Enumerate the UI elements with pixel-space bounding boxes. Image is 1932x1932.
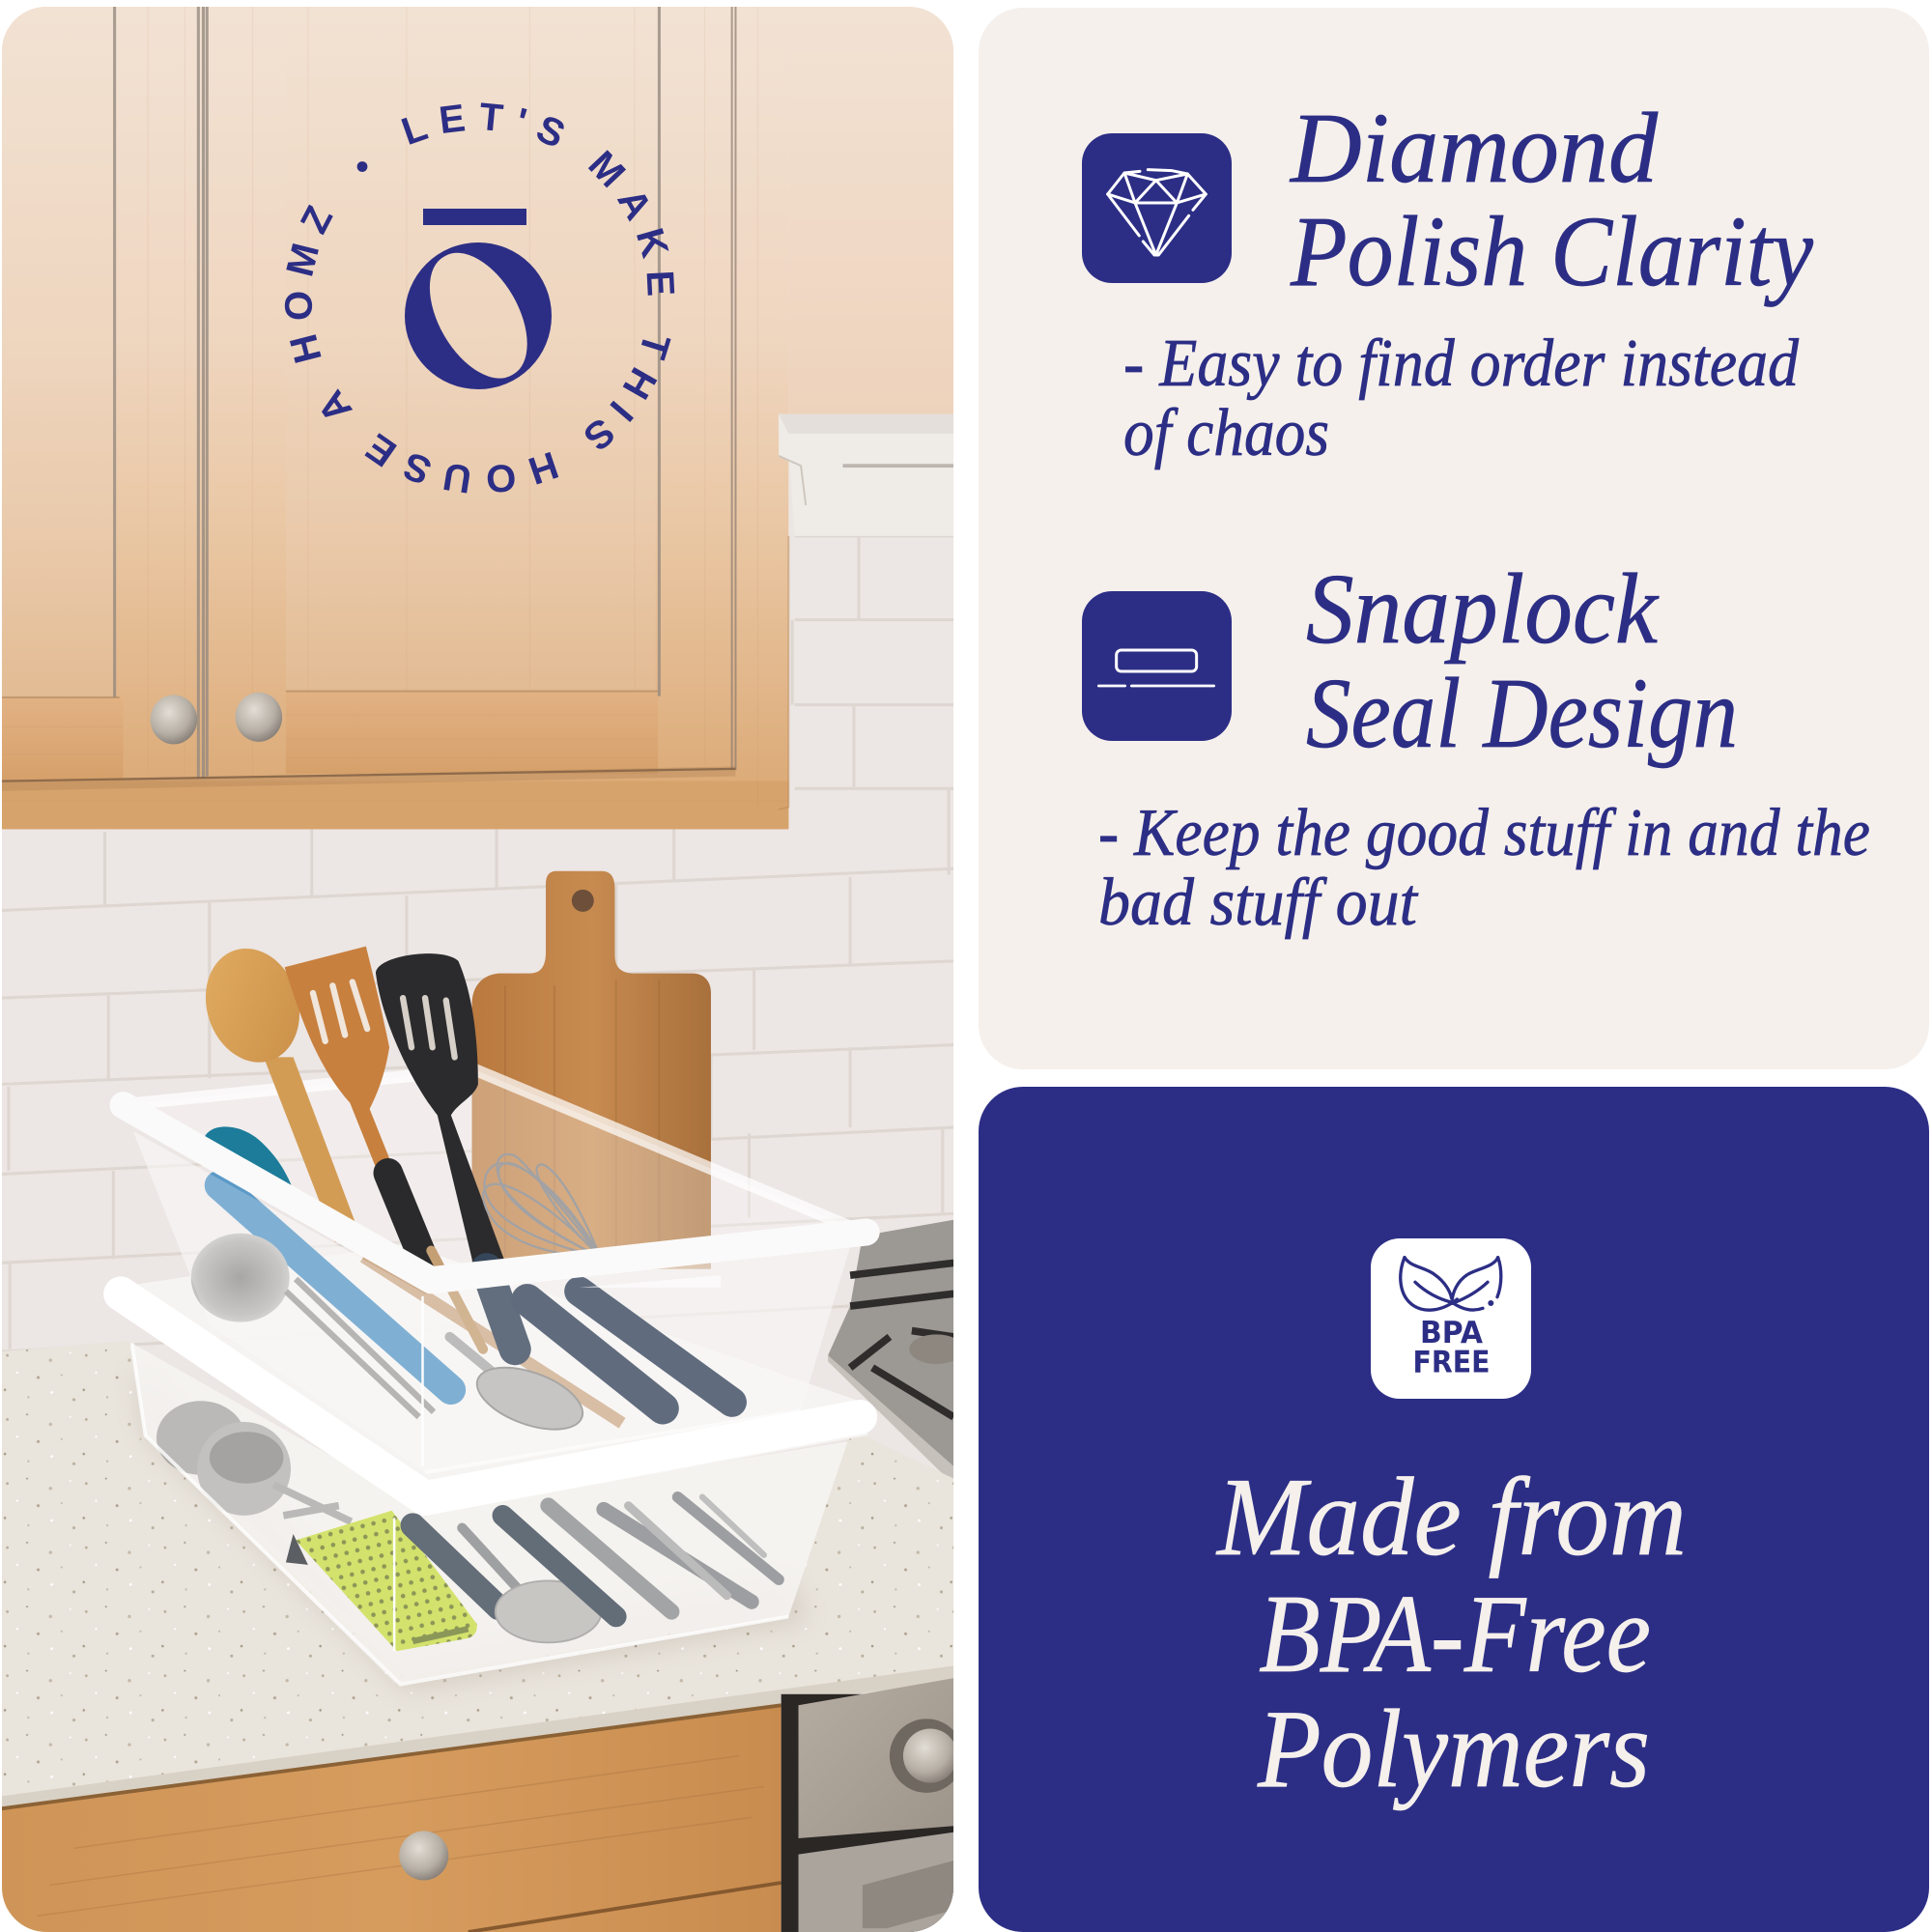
logo letter o <box>405 242 552 389</box>
tiled backsplash wall <box>2 536 953 1351</box>
heading: Snaplock Seal Design: Snaplock <box>1306 554 1660 665</box>
oven front <box>781 1678 963 1932</box>
lime grater <box>286 1511 477 1651</box>
kitchen tools <box>412 1497 779 1642</box>
text: easy to find order: of chaos <box>1123 396 1329 470</box>
heading: Diamond Polish Clarity <box>1289 93 1814 307</box>
lower container <box>113 1244 870 1685</box>
panel: BPA free <box>979 1087 1929 1932</box>
measuring cups <box>156 1401 352 1521</box>
range hood <box>779 414 953 536</box>
logo ring text: LET'S MAKE THIS HOUSE A HOMZ <box>284 102 674 493</box>
measuring spoon <box>191 1234 434 1417</box>
dark handled tools <box>431 1251 732 1441</box>
panel: kitchen photo <box>0 6 963 1932</box>
icon: BPA free badge: BPA <box>1420 1316 1483 1350</box>
shadow under containers <box>135 1368 807 1690</box>
text: easy to find order <box>1123 327 1800 470</box>
heading: Snaplock Seal Design: Seal Design <box>1306 658 1738 769</box>
whisk <box>483 1154 600 1257</box>
icon: BPA free badge <box>1371 1238 1531 1399</box>
heading: Diamond Polish Clarity: Polish Clarity <box>1290 196 1814 307</box>
icon: BPA free badge: FREE <box>1412 1345 1490 1379</box>
upper cabinet <box>0 6 953 829</box>
upper container back <box>276 1071 822 1262</box>
heading: Diamond Polish Clarity: Diamond <box>1289 93 1659 204</box>
black spatula <box>376 953 515 1350</box>
lower container lid <box>137 1245 867 1480</box>
icon: snaplock seal <box>1082 591 1232 741</box>
cutting board <box>472 871 711 1269</box>
blue spatula <box>203 1126 451 1390</box>
wooden spatula <box>285 947 425 1263</box>
heading: made from BPA-free polymers: Made from <box>1215 1456 1687 1579</box>
text: keep the good stuff: bad stuff out <box>1098 866 1418 940</box>
upper container <box>117 936 868 1472</box>
lower container body <box>131 1343 848 1683</box>
panel: features <box>979 8 1929 1069</box>
logo: circular badge <box>284 102 674 493</box>
heading: made from BPA-free polymers: BPA-Free <box>1259 1573 1651 1696</box>
cabinet knobs <box>151 693 282 744</box>
lower drawer cabinet <box>0 1705 781 1932</box>
icon: diamond <box>1082 133 1232 283</box>
heading: made from BPA-free polymers: Polymers <box>1257 1688 1650 1811</box>
countertop <box>0 1341 953 1811</box>
text: easy to find order: - Easy to find order instead <box>1123 327 1800 401</box>
text: keep the good stuff: - Keep the good stuff in and the <box>1098 796 1870 870</box>
upper container rim <box>124 1105 867 1280</box>
heading: made from BPA-free polymers <box>1215 1456 1687 1811</box>
stove <box>828 1220 963 1485</box>
text: keep the good stuff <box>1098 796 1870 940</box>
logo macron bar <box>423 209 526 225</box>
logo separator dot <box>357 161 367 172</box>
upper container front walls <box>191 1174 801 1472</box>
wooden spoon <box>191 936 622 1423</box>
heading: Snaplock Seal Design <box>1306 554 1738 769</box>
lower container front walls <box>131 1343 848 1685</box>
